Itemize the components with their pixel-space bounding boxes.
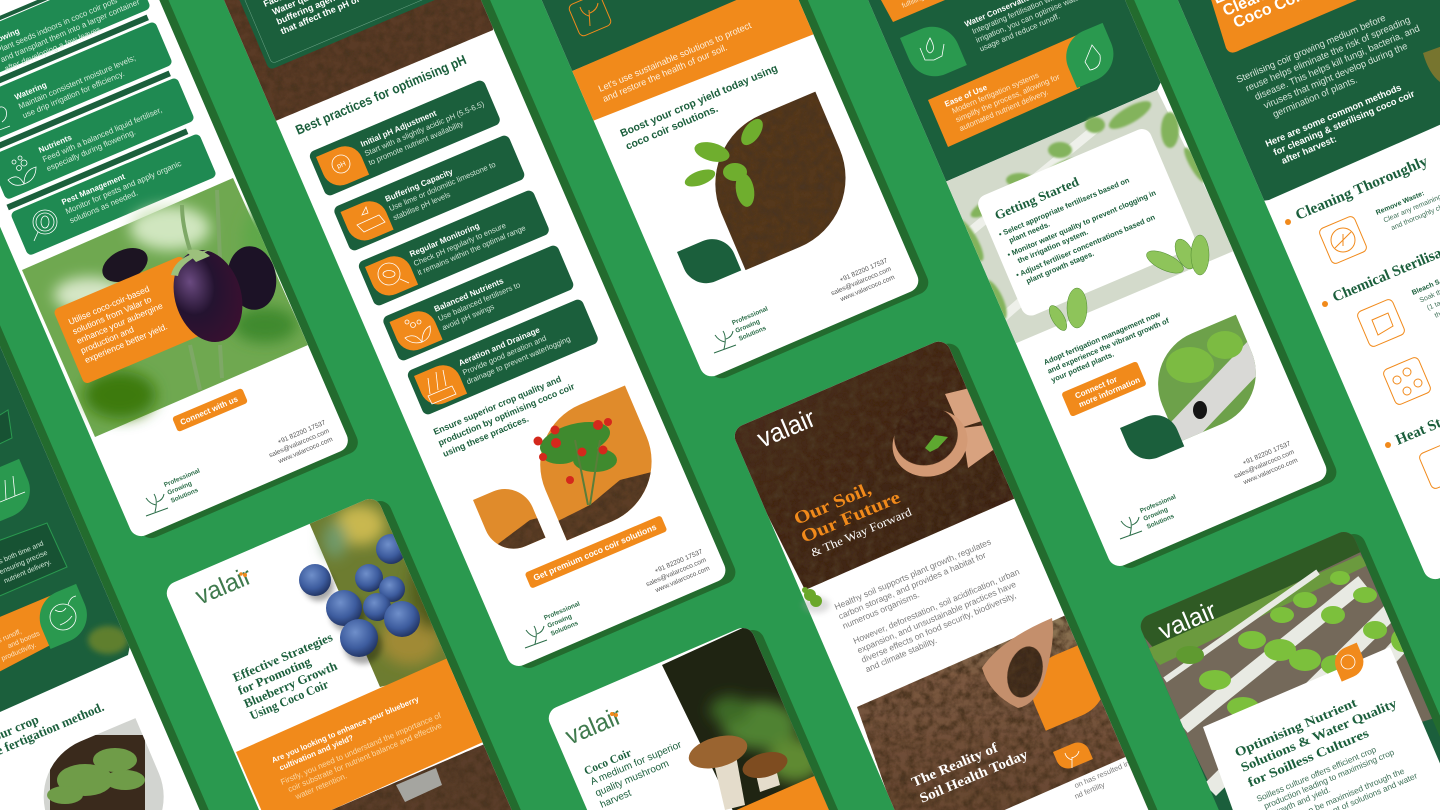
blur: olive blob bbox=[88, 626, 128, 654]
title: our soil our future: Our Soil, bbox=[791, 478, 874, 529]
panel: blueberry strategies card bbox=[150, 480, 584, 810]
text: common methods: for cleaning & sterilising coco coir bbox=[1272, 89, 1416, 157]
title: our soil our future: Our Future bbox=[798, 487, 903, 547]
text: adopt fertigation: and experience the vibrant growth of bbox=[1046, 316, 1171, 376]
text: mushroom subtitle: A medium for superior bbox=[589, 739, 684, 788]
panel: our soil our future card bbox=[720, 320, 1232, 810]
text: lower white panel: nd fertility bbox=[1073, 780, 1106, 801]
panel: soilless culture card bbox=[1130, 510, 1440, 810]
text: soil introduction: Healthy soil supports plant growth, regulates bbox=[833, 537, 992, 612]
text: adopt fertigation: Adopt fertigation management now bbox=[1042, 309, 1162, 367]
text: soil introduction: and climate stability. bbox=[864, 635, 938, 674]
blur: olive leaf bbox=[1423, 45, 1440, 85]
band: orange productivity strip: and boosts bbox=[7, 630, 41, 650]
row: nutrients bbox=[0, 71, 195, 200]
title: our soil our future bbox=[791, 478, 914, 560]
card: soilless culture text: Optimising Nutrient bbox=[1232, 694, 1359, 760]
item: ease of use bbox=[928, 23, 1122, 147]
row: buffering capacity: stabilise pH levels bbox=[392, 190, 452, 222]
callout: pH facts bbox=[240, 0, 434, 69]
band: orange blueberry message: Firstly, you need to understand the importance of bbox=[279, 711, 443, 787]
row: balanced nutrients: Balanced Nutrients bbox=[433, 276, 505, 314]
logo: professional growing solutions: Solutions bbox=[170, 487, 200, 505]
button: connect for more information: Connect for bbox=[1074, 375, 1118, 401]
text: sterilising intro: disease. This helps kill fungi, bacteria, and bbox=[1253, 23, 1422, 103]
band: orange bottom strip bbox=[725, 770, 860, 810]
band: top orange strip bbox=[881, 0, 945, 22]
button: get premium coco coir solutions: Get premium coco coir solutions bbox=[532, 522, 658, 583]
heading: best practices: Best practices for optimising pH bbox=[293, 52, 469, 138]
row: aeration and drainage: Provide good aeration and bbox=[461, 334, 548, 377]
text: sterilising intro: viruses that might develop during the bbox=[1262, 41, 1409, 112]
heading: reality of soil health: Soil Health Today bbox=[918, 748, 1030, 807]
row: pest management: Monitor for pests and apply organic bbox=[64, 159, 183, 216]
logo: professional growing solutions bbox=[146, 468, 200, 516]
logo: professional growing solutions: Solutions bbox=[1146, 513, 1176, 531]
text: ensure superior crop quality: production by optimising coco coir bbox=[437, 381, 576, 448]
photo: coir soil bbox=[200, 0, 493, 122]
photo: blueberry foliage bbox=[308, 480, 490, 687]
row: watering: Watering bbox=[13, 80, 48, 102]
heading: effective strategies bbox=[231, 630, 339, 723]
row: sowing: after developing a few leaves. bbox=[3, 24, 104, 73]
band: orange productivity strip: productivity. bbox=[1, 642, 37, 663]
button: connect for more information: more information bbox=[1077, 375, 1142, 409]
callout: orange aubergine message: production and bbox=[79, 324, 136, 356]
logo: professional growing solutions: Growing bbox=[166, 480, 193, 497]
row: balanced nutrients: avoid pH swings bbox=[441, 302, 496, 332]
text: ensure superior crop quality: Ensure superior crop quality and bbox=[432, 374, 563, 437]
row: nutrients: Nutrients bbox=[37, 133, 74, 155]
logo: professional growing solutions: Professional bbox=[543, 600, 581, 622]
logo: professional growing solutions: Growing bbox=[1142, 506, 1169, 523]
callout: orange aubergine message: experience better yield. bbox=[83, 321, 169, 365]
text: adopt fertigation: your potted plants. bbox=[1050, 350, 1115, 384]
logo: professional growing solutions: Professional bbox=[1139, 493, 1177, 515]
logo: professional growing solutions bbox=[524, 601, 580, 648]
icon: orange leaf with seedling bbox=[1053, 739, 1093, 772]
logo: professional growing solutions: Solutions bbox=[550, 620, 580, 638]
logo: valair white: valair bbox=[753, 402, 820, 454]
icon: bug in magnifier bbox=[33, 210, 57, 241]
callout: orange aubergine message: Utilise coco-coir-based bbox=[67, 284, 151, 327]
photo: mushrooms bbox=[662, 620, 860, 810]
item: ease of use: Ease of Use bbox=[943, 83, 989, 109]
row: buffering capacity: Buffering Capacity bbox=[384, 167, 455, 204]
row: regular monitoring: it remains within the optimal range bbox=[416, 223, 527, 277]
card: soilless culture text: Solutions & Water Quality bbox=[1238, 695, 1399, 775]
row: initial pH adjustment: pH bbox=[336, 160, 347, 170]
section: chemical sterilisation bbox=[1322, 235, 1440, 406]
photo: hydroponic rows bbox=[1130, 520, 1440, 790]
card: getting started: • Monitor water quality to prevent clogging in bbox=[1006, 188, 1158, 259]
item: ease of use: simplify the process, allowing for bbox=[954, 72, 1061, 124]
item: water conservation: usage and reduce runoff. bbox=[978, 11, 1061, 54]
panel: aubergine growing guide card bbox=[0, 0, 358, 538]
card: soilless culture text: for Soilless Cultures bbox=[1245, 725, 1371, 790]
row: initial pH adjustment: Initial pH Adjustment bbox=[359, 109, 438, 149]
heading: effective strategies: for Promoting bbox=[236, 654, 314, 698]
card: getting started: plant growth stages. bbox=[1025, 249, 1095, 286]
card: soilless culture text bbox=[1203, 647, 1440, 810]
section: cleaning thoroughly: Cleaning Thoroughly bbox=[1293, 153, 1431, 224]
illustration: soil leaf with seedling bbox=[684, 92, 846, 270]
text: soil introduction: carbon storage, and provides a habitat for bbox=[837, 550, 987, 621]
text: contact details: sales@valarcoco.com bbox=[645, 556, 708, 588]
illustration: plants in pipes leaf bbox=[1130, 300, 1270, 460]
text: lower white panel bbox=[1000, 755, 1200, 810]
text: contact details: sales@valarcoco.com bbox=[268, 427, 331, 459]
row: regular monitoring bbox=[357, 189, 551, 307]
text: contact details: www.valarcoco.com bbox=[277, 436, 334, 466]
text: soil introduction: expansion, and unsustainable practices have bbox=[856, 579, 1018, 655]
text: common methods: after harvest: bbox=[1280, 134, 1338, 166]
logo: professional growing solutions: Growing bbox=[546, 613, 573, 630]
title: our soil our future: & The Way Forward bbox=[809, 505, 914, 560]
text: contact details: +91 82200 17537 bbox=[277, 419, 327, 446]
logo: professional growing solutions: Solutions bbox=[738, 325, 768, 343]
text: ensure superior crop quality: using these practices. bbox=[441, 414, 530, 459]
band: orange blueberry message bbox=[236, 657, 510, 810]
item: ease of use: Modern fertigation systems bbox=[950, 71, 1040, 116]
decoration: shrub at card edge bbox=[802, 587, 830, 613]
section: heat sterilisation bbox=[1385, 390, 1440, 490]
logo: professional growing solutions: Professional bbox=[731, 305, 769, 327]
card: soilless culture text: Soilless culture offers efficient crop bbox=[1255, 744, 1378, 804]
card: getting started: Getting Started bbox=[992, 173, 1082, 223]
button: connect with us: Connect with us bbox=[179, 394, 240, 427]
text: lower white panel: on has resulted in bbox=[1073, 759, 1131, 790]
row: watering bbox=[0, 15, 173, 144]
card: soilless culture text: production leading to maximising crop bbox=[1262, 747, 1396, 810]
heading: boost your crop yield: coco coir solutions. bbox=[624, 103, 720, 153]
logo: professional growing solutions: Growing bbox=[734, 318, 761, 335]
section: cleaning thoroughly bbox=[1285, 153, 1440, 265]
item: water conservation bbox=[900, 0, 1078, 76]
text: contact details: www.valarcoco.com bbox=[1242, 457, 1299, 487]
band: orange blueberry message: water retention. bbox=[293, 771, 348, 802]
text: common methods: Here are some common methods bbox=[1264, 82, 1403, 149]
button: connect with us bbox=[172, 388, 248, 432]
callout: orange aubergine message bbox=[54, 256, 198, 383]
row: pest management: solutions as needed. bbox=[68, 188, 139, 225]
heading: effective strategies: Blueberry Growth bbox=[242, 659, 339, 711]
logo: professional growing solutions bbox=[714, 306, 768, 354]
row: aeration and drainage: Aeration and Drainage bbox=[457, 325, 542, 368]
row: pest management: Pest Management bbox=[60, 172, 127, 207]
row: nutrients: Feed with a balanced liquid fertiliser, bbox=[41, 105, 163, 164]
card: getting started: • Select appropriate fertilisers based on bbox=[997, 175, 1131, 239]
logo: valair green: valair bbox=[561, 702, 626, 751]
text: sterilising intro: Sterilising coir growing medium before bbox=[1235, 13, 1387, 86]
panel: boost crop yield card bbox=[542, 0, 928, 378]
icon: dark green leaf bbox=[677, 239, 742, 284]
photo: pot in soil bbox=[320, 733, 540, 810]
text: soil introduction: numerous organisms. bbox=[841, 589, 921, 631]
band: orange blueberry message: coir substrate for nutrient balance and effective bbox=[287, 721, 444, 794]
card: getting started: • Adjust fertiliser concentrations based on bbox=[1015, 212, 1157, 280]
heading: effective strategies: Using Coco Coir bbox=[248, 677, 331, 723]
band: orange sustainable message: Let's use sustainable solutions to protect bbox=[597, 20, 753, 94]
band: orange blueberry message: cultivation and yield? bbox=[278, 733, 355, 772]
callout: outlined saving box bbox=[0, 523, 67, 601]
icon: green leaf with seedlings bbox=[0, 459, 39, 524]
text: contact details: +91 82200 17537 bbox=[654, 548, 704, 575]
text: soil introduction: However, deforestation, soil acidification, urban bbox=[852, 566, 1021, 646]
photo: hydroponic seedlings bbox=[945, 90, 1236, 345]
photo: plant in round leaf bbox=[15, 710, 170, 810]
panel: best practices for pH card bbox=[224, 0, 736, 668]
icon: orange leaf badge bbox=[1330, 643, 1368, 682]
row: watering: Maintain consistent moisture levels; bbox=[17, 53, 137, 111]
card: getting started: the irrigation system. bbox=[1016, 227, 1089, 265]
row: balanced nutrients: Use balanced fertilisers to bbox=[437, 280, 522, 323]
row: regular monitoring: Regular Monitoring bbox=[408, 221, 481, 259]
band: orange productivity strip bbox=[0, 584, 96, 674]
icon: plant square bbox=[568, 0, 612, 37]
illustration: tomato leaf bbox=[473, 386, 652, 549]
row: buffering capacity bbox=[332, 134, 526, 252]
panel: mushroom coco coir card bbox=[530, 610, 917, 810]
panel: cleaning and sterilising card bbox=[1140, 0, 1440, 630]
photo: aubergines bbox=[22, 178, 308, 437]
text: contact details: sales@valarcoco.com bbox=[1233, 448, 1296, 480]
band: orange sustainable message bbox=[572, 0, 814, 121]
text: soil introduction: diverse effects on food security, biodiversity, bbox=[860, 590, 1017, 665]
card: getting started: plant needs. bbox=[1007, 220, 1051, 245]
text: mushroom subtitle: quality mushroom bbox=[594, 758, 671, 799]
band: orange blueberry message: Are you looking to enhance your blueberry bbox=[270, 694, 421, 765]
row: initial pH adjustment: Start with a slightly acidic pH (5.5-6.5) bbox=[363, 99, 486, 158]
row: initial pH adjustment: to promote nutrient availability bbox=[367, 119, 465, 167]
text: sterilising intro: reuse helps eliminate the risk of spreading bbox=[1244, 15, 1412, 94]
heading: orange title box bbox=[1205, 0, 1380, 53]
text: contact details: +91 82200 17537 bbox=[1242, 440, 1292, 467]
icon: nutrient plant bbox=[8, 156, 36, 185]
heading: reality of soil health: The Reality of bbox=[910, 741, 1001, 791]
logo: valair white: valair bbox=[1154, 596, 1221, 646]
logo: professional growing solutions: Professional bbox=[163, 467, 201, 489]
callout: orange aubergine message: enhance your aubergine bbox=[75, 300, 164, 346]
row: pest management bbox=[6, 129, 217, 256]
callout: outlined saving box: nutrient delivery. bbox=[3, 559, 53, 585]
panel: fertigation getting started card bbox=[868, 0, 1336, 568]
row: nutrients: especially during flowering. bbox=[45, 127, 137, 173]
row: balanced nutrients bbox=[382, 244, 575, 362]
row: regular monitoring: Check pH regularly to ensure bbox=[412, 221, 507, 268]
text: contact details: www.valarcoco.com bbox=[839, 274, 896, 304]
text: contact details: sales@valarcoco.com bbox=[830, 265, 893, 297]
heading: boost your crop yield: Boost your crop yield today using bbox=[618, 62, 779, 140]
item: ease of use: automated nutrient delivery. bbox=[958, 87, 1049, 133]
row: buffering capacity: Use lime or dolomitic limestone to bbox=[388, 160, 497, 213]
row: aeration and drainage bbox=[406, 298, 600, 416]
card: getting started bbox=[975, 126, 1209, 333]
logo: professional growing solutions bbox=[1120, 493, 1184, 539]
text: contact details: +91 82200 17537 bbox=[839, 257, 889, 284]
icon: dark green leaf bbox=[1120, 408, 1184, 467]
photo: soil pouring from hand bbox=[857, 612, 1170, 810]
row: aeration and drainage: drainage to prevent waterlogging bbox=[465, 334, 572, 386]
row: initial pH adjustment bbox=[308, 79, 502, 197]
heading: coco coir: Coco Coir bbox=[582, 747, 633, 778]
photo: blueberries bbox=[299, 534, 420, 664]
row: watering: use drip irrigation for efficiency. bbox=[21, 69, 126, 120]
section: cleaning thoroughly: Remove Waste: bbox=[1375, 190, 1426, 217]
item: upper outlined box bbox=[0, 410, 12, 446]
text: contact details: www.valarcoco.com bbox=[654, 565, 711, 595]
logo: valair green: valair bbox=[191, 562, 256, 611]
panel: fertigation method card (left edge) bbox=[0, 116, 280, 810]
button: connect for more information bbox=[1061, 361, 1147, 417]
heading: effective strategies: Effective Strategies bbox=[231, 630, 335, 685]
band: orange sustainable message: and restore the health of our soil. bbox=[601, 42, 729, 104]
callout: orange aubergine message: solutions from Valar to bbox=[71, 294, 153, 336]
text: sterilising intro: germination of plants. bbox=[1271, 75, 1359, 120]
photo: dark soil with hands bbox=[720, 320, 1018, 590]
